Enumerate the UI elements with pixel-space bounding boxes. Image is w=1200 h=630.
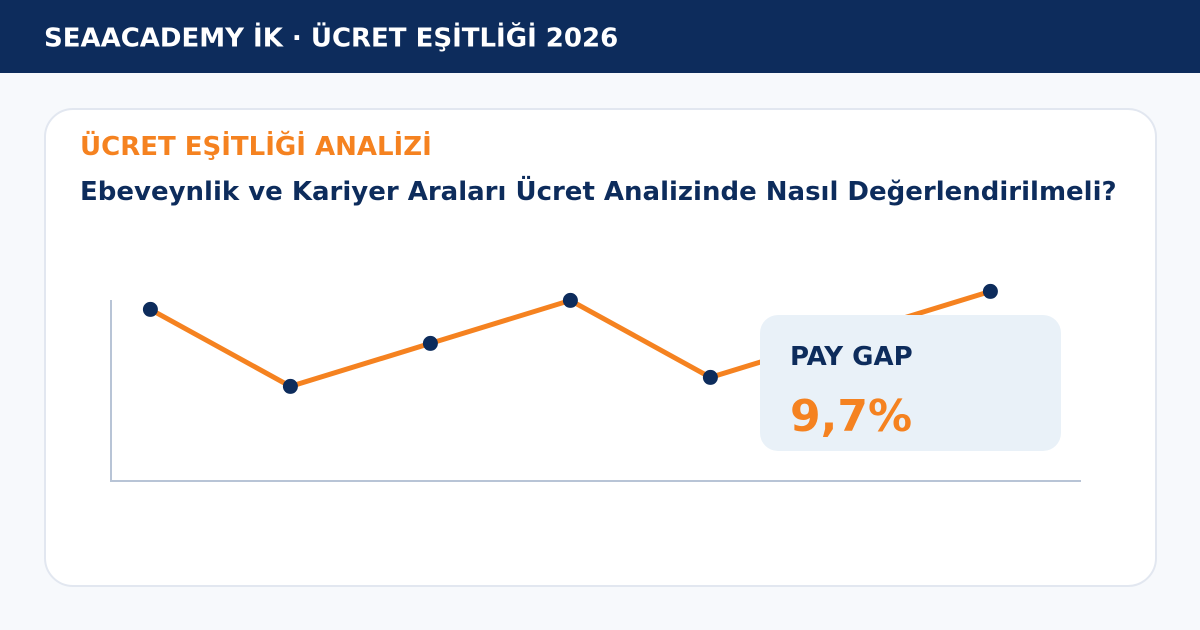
header title: SEAACADEMY İK · ÜCRET EŞİTLİĞİ 2026 (44, 20, 618, 54)
callout label: PAY GAP (790, 342, 913, 372)
chart axes (111, 300, 1081, 481)
eyebrow heading: ÜCRET EŞİTLİĞİ ANALİZİ (80, 129, 432, 162)
data points (143, 284, 998, 394)
trend line (150, 291, 990, 386)
line chart (111, 284, 1081, 481)
panel: main card (45, 109, 1156, 586)
callout: pay gap (760, 315, 1061, 451)
callout value: 9,7% (790, 391, 912, 442)
question heading: Ebeveynlik ve Kariyer Araları Ücret Analizinde Nasıl Değerlendirilmeli? (80, 174, 1117, 207)
header band (0, 0, 1200, 73)
